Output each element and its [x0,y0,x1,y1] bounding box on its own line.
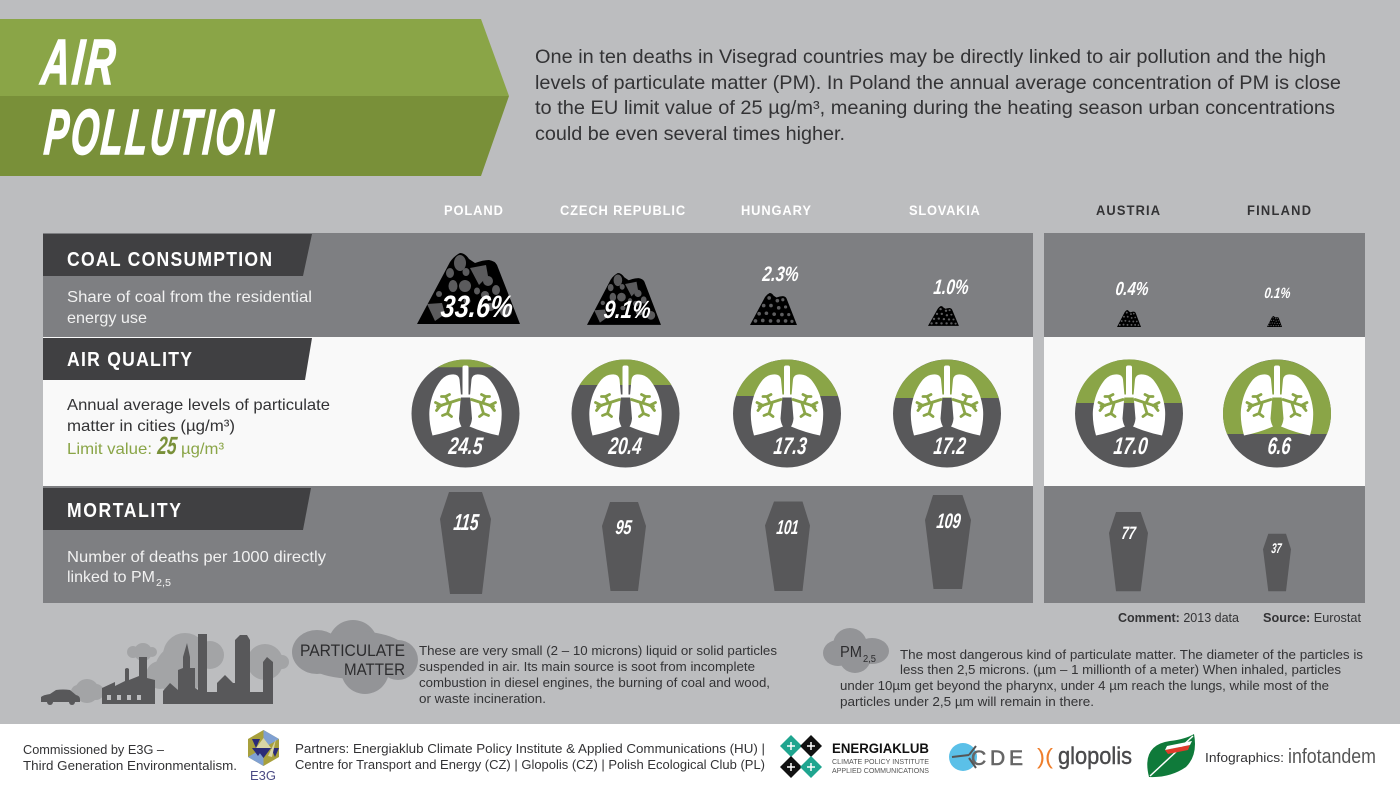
lungs gauge: Czech Republic 20.4: 20.4 [607,433,643,460]
title banner: AIR [37,28,118,98]
air quality description: 25 [156,432,179,460]
partners text: Centre for Transport and Energy (CZ) | Glopolis (CZ) | Polish Ecological Club (PL) [295,758,765,772]
heading: air quality: AIR QUALITY [67,348,192,370]
country headers: HUNGARY [741,203,811,218]
logo: E3G [248,730,279,783]
lungs gauge: Finland 6.6: 6.6 [1266,433,1293,460]
country headers: FINLAND [1247,203,1311,218]
partners text: Partners: Energiaklub Climate Policy Institute & Applied Communications (HU) | [295,742,765,756]
lungs gauge: Slovakia 17.2: 17.2 [932,433,968,460]
cloud: PM2,5: 2,5 [863,654,876,665]
panel: mortality [43,486,1365,603]
heading: air quality [43,338,312,380]
coal pile: Czech Republic [587,273,661,325]
text: PM2,5 definition: under 10µm get beyond the pharynx, under 4 µm reach the lungs, while most of the [840,679,1329,693]
mortality description: linked to PM [67,569,155,586]
coal pile: Hungary [750,263,800,325]
country headers: SLOVAKIA [909,203,980,218]
coal pile: Poland [417,253,520,324]
illustration: city, factory and car with smog [41,633,289,705]
logo: Energiaklub: ENERGIAKLUB [832,741,929,756]
title banner: POLLUTION [42,97,276,169]
cloud: particulate matter: MATTER [344,661,405,679]
country headers [444,203,1311,218]
logo: CDE: CDE [971,747,1023,770]
coal pile: Austria: 0.4% [1114,279,1150,300]
mortality description: Number of deaths per 1000 directly [67,549,326,566]
lungs gauge: Austria 17.0: 17.0 [1112,433,1150,460]
panel: coal consumption [43,233,1365,337]
text: particulate matter definition: These are very small (2 – 10 microns) liquid or solid particles [419,644,777,658]
panel: air quality [43,337,1365,486]
country headers: POLAND [444,203,503,218]
text: PM2,5 definition: The most dangerous kind of particulate matter. The diameter of the particles is [900,648,1363,662]
coffin: Slovakia 109: 109 [935,510,962,533]
air quality description: matter in cities (µg/m³) [67,418,235,435]
coal pile: Slovakia [928,276,970,326]
lungs gauge: Poland 24.5: 24.5 [447,433,485,460]
logo: E3G: E3G [250,768,276,783]
intro paragraph: could be even several times higher. [535,123,845,145]
mortality description [67,549,326,589]
air quality description: Annual average levels of particulate [67,397,330,414]
cloud: particulate matter [292,620,418,694]
coffin: Czech Republic 95 [602,502,646,591]
commissioned by text: Commissioned by E3G – [23,743,164,757]
country headers: AUSTRIA [1096,203,1160,218]
coal pile: Austria [1114,279,1150,327]
lungs gauge: Czech Republic 20.4 [572,359,680,468]
coal pile: Finland [1264,285,1291,327]
lungs gauge: Austria 17.0 [1075,359,1183,468]
text: particulate matter definition: combustion in diesel engines, the burning of coal and wood, [419,676,770,690]
air quality description [67,397,330,460]
source note: Source: Eurostat [1263,611,1362,625]
cloud: PM2,5: PM [840,644,862,661]
coal description: energy use [67,310,147,327]
logo: Energiaklub: APPLIED COMMUNICATIONS [832,766,929,775]
logo: Energiaklub: CLIMATE POLICY INSTITUTE [832,757,929,766]
cloud: PM2,5 [823,628,889,673]
coffin: Finland 37 [1263,534,1291,591]
logo: glopolis: )( [1037,744,1054,769]
text: PM2,5 definition: less then 2,5 microns. (µm – 1 millionth of a meter) When inhaled, particles [900,663,1341,677]
intro paragraph: to the EU limit value of 25 µg/m³, meaning during the heating season urban concentrations [535,97,1335,119]
cloud: particulate matter: PARTICULATE [300,642,405,660]
air quality description: Limit value: [67,441,152,458]
air quality description: µg/m³ [181,441,225,458]
coffin: Czech Republic 95: 95 [614,517,633,539]
intro paragraph: One in ten deaths in Visegrad countries may be directly linked to air pollution and the high [535,46,1326,68]
coffin: Hungary 101: 101 [775,517,800,539]
lungs gauge: Finland 6.6 [1223,360,1331,468]
partners text [295,742,765,772]
coal description [67,289,312,327]
source note [1118,611,1362,625]
intro paragraph [535,46,1341,145]
heading: mortality [43,488,311,530]
coal description: Share of coal from the residential [67,289,312,306]
coal pile: Slovakia: 1.0% [932,276,970,299]
lungs gauge: Hungary 17.3: 17.3 [772,433,809,460]
lungs gauge: Slovakia 17.2 [893,360,1001,468]
heading: mortality: MORTALITY [67,499,181,521]
logo: glopolis: glopolis [1058,743,1132,770]
coffin: Hungary 101 [765,502,810,591]
heading: coal consumption [43,234,312,276]
coffin: Poland 115: 115 [452,509,481,535]
text: particulate matter definition: suspended in air. Its main source is soot from incomplete [419,660,755,674]
coal pile: Hungary: 2.3% [761,263,800,286]
mortality description: 2,5 [156,578,171,589]
logo: Energiaklub [780,735,929,778]
footer band [0,724,1400,788]
coal pile: Poland: 33.6% [439,289,515,324]
logo: Polish Ecological Club leaf [1147,734,1195,777]
infographics credit: infotandem [1288,746,1376,768]
coffin: Poland 115 [440,492,491,594]
infographics credit [1205,746,1376,768]
text: particulate matter definition: or waste incineration. [419,692,546,706]
coal pile: Czech Republic: 9.1% [602,296,652,324]
intro paragraph: levels of particulate matter (PM). In Poland the annual average concentration of PM is close [535,72,1341,94]
text: PM2,5 definition: particles under 2,5 µm will remain in there. [840,695,1094,709]
lungs gauge: Hungary 17.3 [733,359,841,468]
lungs gauge: Poland 24.5 [412,359,520,468]
commissioned by text: Third Generation Environmentalism. [23,759,237,773]
commissioned by text [23,743,237,773]
coal pile: Finland: 0.1% [1264,285,1291,302]
source note: Comment: 2013 data [1118,611,1239,625]
infographics credit: Infographics: [1205,750,1284,765]
text: PM2,5 definition [840,648,1363,709]
country headers: CZECH REPUBLIC [560,203,685,218]
coffin: Austria 77: 77 [1121,523,1137,543]
logo: CDE [949,743,1023,771]
coffin: Finland 37: 37 [1271,540,1283,556]
heading: coal consumption: COAL CONSUMPTION [67,248,272,270]
text: particulate matter definition [419,644,777,706]
title banner [0,19,509,176]
coffin: Slovakia 109 [925,495,971,589]
coffin: Austria 77 [1109,512,1148,591]
